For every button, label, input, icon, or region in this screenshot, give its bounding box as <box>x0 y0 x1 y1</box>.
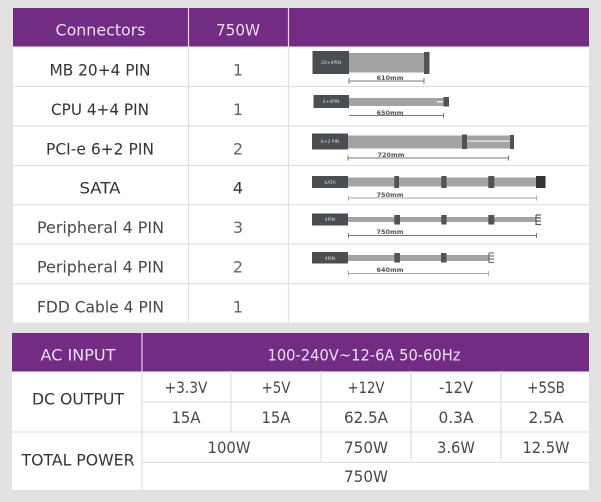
row labels: DC OUTPUT <box>32 390 124 408</box>
cable diagram: PCI-e 6+2 PIN: 6+2 PIN <box>321 139 339 145</box>
total power per rail: 12.5W <box>522 438 570 457</box>
table header row: Connectors <box>56 20 146 40</box>
DC output currents: 15A <box>262 408 291 427</box>
AC input header row: AC INPUT <box>40 346 116 364</box>
cable diagram: CPU 4+4 PIN <box>314 95 449 118</box>
connector quantity column: 3 <box>233 218 243 237</box>
combined total power: 750W <box>344 467 388 486</box>
DC output voltages: +5SB <box>527 378 565 397</box>
connector names column: CPU 4+4 PIN <box>51 100 149 119</box>
AC input header row: 100-240V~12-6A 50-60Hz <box>268 346 460 364</box>
total power per rail: 750W <box>344 438 388 457</box>
DC output currents: 0.3A <box>438 408 474 427</box>
table header row: 750W <box>216 20 260 40</box>
DC output currents: 15A <box>172 408 201 427</box>
cable diagram: CPU 4+4 PIN: 650mm <box>376 109 404 117</box>
total power per rail: 100W <box>208 438 251 457</box>
cable diagram: MB 20+4 PIN: 20+4PIN <box>321 60 341 66</box>
connector names column: PCI-e 6+2 PIN <box>46 140 154 158</box>
cable diagram: Peripheral 4 PIN, 3 connectors: 4PIN <box>325 217 335 223</box>
connector names column: SATA <box>80 178 121 198</box>
connector names column: Peripheral 4 PIN <box>37 258 164 276</box>
cable diagram: SATA <box>312 176 546 200</box>
panel: connectors table <box>13 8 589 322</box>
cable diagram: CPU 4+4 PIN: 4+4PIN <box>323 99 339 105</box>
connector quantity column: 2 <box>233 140 243 158</box>
cable diagram: PCI-e 6+2 PIN: 720mm <box>377 151 405 159</box>
connector quantity column: 1 <box>233 298 243 316</box>
connector quantity column: 1 <box>233 60 243 80</box>
cable diagram: MB 20+4 PIN <box>312 51 430 84</box>
connector names column: Peripheral 4 PIN <box>37 218 164 237</box>
DC output voltages <box>164 378 565 397</box>
DC output voltages: +3.3V <box>164 378 208 397</box>
cable diagram: PCI-e 6+2 PIN <box>312 134 514 160</box>
DC output currents: 62.5A <box>344 408 388 427</box>
connector names column: FDD Cable 4 PIN <box>37 298 164 316</box>
AC input header row <box>12 333 589 372</box>
cable diagram: Peripheral 4 PIN, 3 connectors: 750mm <box>376 228 404 236</box>
row labels: TOTAL POWER <box>21 450 134 470</box>
connector quantity column: 4 <box>233 178 243 198</box>
connector quantity column: 2 <box>233 258 243 276</box>
cable diagram: SATA: 750mm <box>376 191 404 199</box>
cable diagram: SATA: SATA <box>324 180 336 186</box>
connector names column <box>37 60 164 316</box>
connector quantity column <box>233 60 243 316</box>
connector names column: MB 20+4 PIN <box>50 60 150 80</box>
cable diagram: Peripheral 4 PIN, 3 connectors <box>312 214 541 238</box>
panel: power specifications table <box>12 333 589 490</box>
DC output currents: 2.5A <box>528 408 564 427</box>
cable diagram: MB 20+4 PIN: 610mm <box>376 74 404 82</box>
DC output voltages: +12V <box>348 378 385 397</box>
connector quantity column: 1 <box>233 100 243 119</box>
cable diagram: Peripheral 4 PIN, 2 connectors: 4PIN <box>325 256 335 262</box>
DC output voltages: -12V <box>439 378 473 397</box>
DC output voltages: +5V <box>262 378 291 397</box>
row labels <box>21 390 134 470</box>
DC output currents <box>172 408 564 427</box>
total power per rail: 3.6W <box>437 438 475 457</box>
total power per rail <box>208 438 570 457</box>
cable diagram: Peripheral 4 PIN, 2 connectors: 640mm <box>376 266 404 274</box>
table header row <box>13 8 589 46</box>
cable diagram: Peripheral 4 PIN, 2 connectors <box>312 252 494 276</box>
